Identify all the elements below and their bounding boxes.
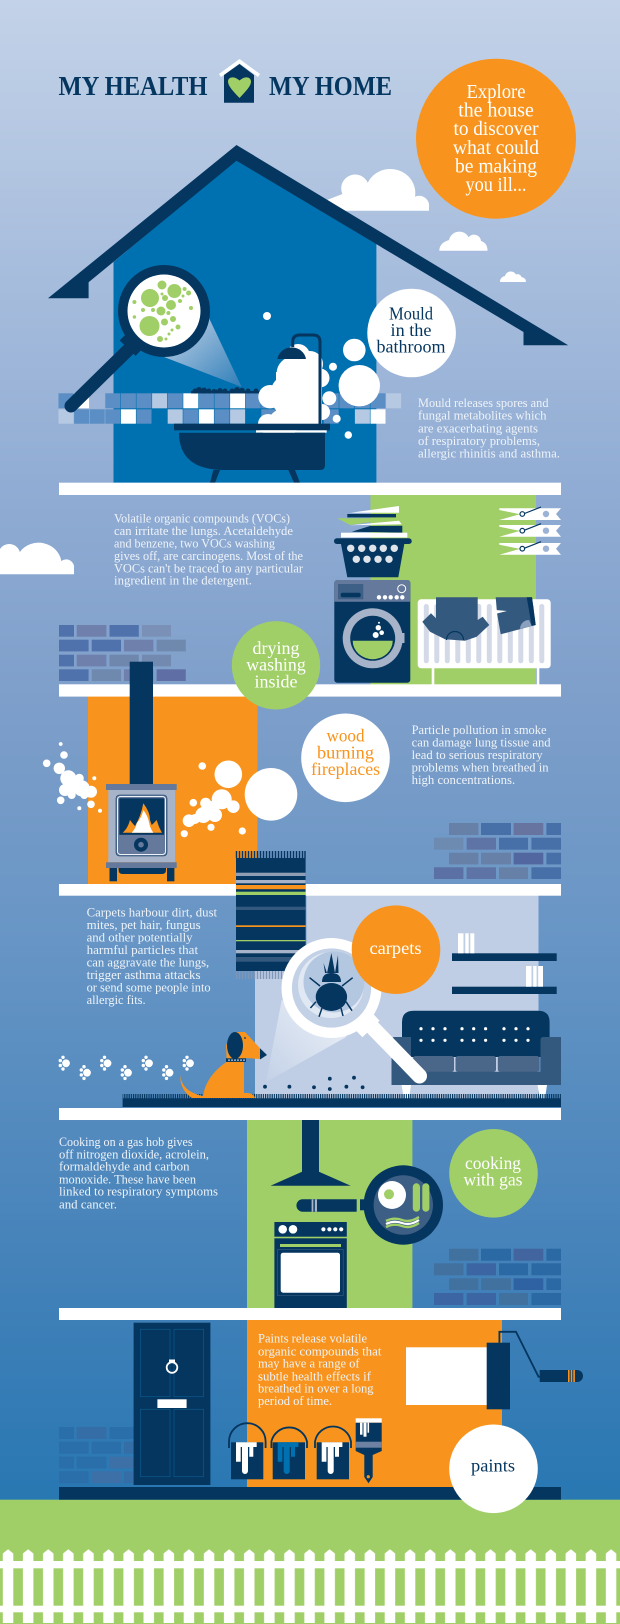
callout: explore the house: to discover [454, 118, 539, 140]
label: carpets: carpets [370, 938, 422, 958]
label: drying washing inside: washing [246, 655, 306, 675]
text: cooking description: and cancer. [59, 1197, 117, 1211]
panel: bathroom wall [114, 160, 376, 483]
text: mould description: are exacerbating agents [418, 421, 538, 435]
icon: magnifying glass with mould [71, 265, 210, 406]
text: particle pollution [412, 723, 551, 787]
text: VOCs: and benzene, two VOCs washing [114, 536, 275, 550]
text: VOCs: Volatile organic compounds (VOCs) [114, 511, 290, 525]
text: carpets description: can aggravate the lungs, [87, 955, 209, 969]
label: paints [449, 1424, 538, 1513]
label: cooking with gas: with gas [464, 1170, 522, 1190]
icon: paint roller [406, 1332, 583, 1409]
carpet floor [123, 1094, 561, 1107]
text: VOCs: ingredient in the detergent. [114, 574, 252, 588]
icon: washing machine [334, 580, 410, 683]
tile band [58, 393, 401, 424]
label: cooking with gas [449, 1129, 538, 1218]
text: cooking description: monoxide. These have been [59, 1172, 196, 1186]
text: mould description: of respiratory problems, [418, 434, 540, 448]
icon: wood burning stove [106, 784, 177, 881]
text: carpets description: or send some people into [87, 980, 211, 994]
text: cooking description: off nitrogen dioxide, acrolein, [59, 1147, 209, 1161]
text: VOCs: can irritate the lungs. Acetaldehyde [114, 524, 294, 538]
label: mould in the bathroom: bathroom [376, 337, 446, 357]
white picket fence [0, 1549, 620, 1624]
shelf 3 [59, 884, 561, 896]
mould patches on tile [191, 387, 260, 394]
label: wood burning fireplaces: burning [317, 742, 374, 762]
callout: explore the house [416, 59, 576, 219]
icon: hanging striped rug [236, 851, 306, 979]
cloud: small [500, 272, 526, 282]
icon: sofa [392, 1011, 561, 1098]
paw prints [59, 1056, 194, 1080]
text: carpets description: Carpets harbour dirt, dust [87, 906, 218, 920]
text: paints description: organic compounds that [258, 1344, 382, 1358]
label: drying washing inside [232, 621, 320, 710]
label: wood burning fireplaces: wood [326, 726, 364, 746]
shelf 5 [59, 1308, 561, 1320]
callout: explore the house: you ill... [466, 174, 526, 196]
icon: front door [134, 1323, 210, 1485]
text: carpets description: and other potentially [87, 930, 193, 944]
cloud: left [0, 543, 74, 574]
title: MY HOME [269, 71, 392, 101]
magnifier beam on mould [164, 318, 242, 387]
text: paints description: period of time. [258, 1394, 332, 1408]
text: cooking description: formaldehyde and carbon [59, 1160, 190, 1174]
bath foam and bubbles [258, 312, 380, 439]
cloud: medium [439, 232, 488, 251]
callout: explore the house: be making [455, 156, 537, 178]
text: paints description [258, 1332, 382, 1408]
text: cooking description [59, 1135, 218, 1211]
text: carpets description: mites, pet hair, fungus [87, 918, 201, 932]
icon: radiator with clothes drying [418, 597, 551, 685]
roof [48, 145, 568, 345]
text: particle pollution: problems when breathed in [412, 761, 549, 775]
text: paints description: subtle health effects if [258, 1369, 372, 1383]
label: drying washing inside: inside [254, 671, 298, 691]
panel: paint wall [247, 1320, 502, 1487]
icon: frying pan [296, 1165, 443, 1245]
text: particle pollution: lead to serious respiratory [412, 748, 543, 762]
icon: laundry basket with clothes [334, 506, 412, 577]
label: mould in the bathroom [367, 289, 456, 377]
text: cooking description: linked to respiratory symptoms [59, 1185, 218, 1199]
text: paints description: may have a range of [258, 1357, 360, 1371]
text: mould description [418, 396, 560, 460]
shelf 1 [59, 483, 561, 495]
icon: magnifying glass with dust mite [282, 938, 420, 1076]
text: particle pollution: can damage lung tissue and [412, 736, 551, 750]
text: mould description: fungal metabolites which [418, 409, 547, 423]
icon: bathtub with shower [174, 335, 330, 483]
text: mould description: Mould releases spores and [418, 396, 549, 410]
label: drying washing inside: drying [252, 638, 300, 658]
text: VOCs: VOCs can't be traced to any particular [114, 561, 304, 575]
smoke right of stove [181, 760, 297, 837]
bricks: upper left [59, 625, 186, 681]
shelf 2 [59, 684, 561, 697]
icon: chimney flue [130, 662, 153, 784]
icon: house with heart logo [219, 59, 260, 103]
text: carpets description [87, 906, 218, 1007]
label: mould in the bathroom: in the [390, 320, 432, 340]
icon: bookshelves [452, 933, 557, 994]
bricks: middle right [434, 823, 561, 879]
text: VOCs [114, 511, 304, 588]
label: paints: paints [471, 1456, 515, 1476]
grass [0, 1500, 620, 1624]
panel: laundry wall [370, 495, 536, 685]
icon: paint cans [229, 1423, 351, 1479]
callout: explore the house: what could [453, 137, 539, 159]
icon: clothes pegs [499, 507, 561, 555]
callout: explore the house: the house [458, 100, 534, 122]
text: particle pollution: Particle pollution in smoke [412, 723, 547, 737]
label: cooking with gas: cooking [465, 1153, 521, 1173]
text: carpets description: harmful particles that [87, 943, 199, 957]
label: wood burning fireplaces [301, 714, 390, 802]
shelf 4 [59, 1108, 561, 1120]
panel: fireplace wall [88, 696, 257, 884]
bricks: bottom left [59, 1427, 134, 1483]
icon: dog [180, 1032, 267, 1098]
panel: kitchen wall [247, 1120, 412, 1308]
smoke left of stove [43, 742, 102, 813]
icon: oven [274, 1222, 347, 1308]
text: VOCs: gives off, are carcinogens. Most of the [114, 549, 303, 563]
text: mould description: allergic rhinitis and asthma. [418, 446, 560, 460]
title [58, 71, 392, 101]
label: carpets [352, 905, 440, 994]
panel: carpets wall [255, 895, 538, 1107]
label: mould in the bathroom: Mould [389, 303, 433, 323]
text: cooking description: Cooking on a gas hob gives [59, 1135, 193, 1149]
title: MY HEALTH [58, 71, 208, 101]
text: paints description: breathed in over a long [258, 1382, 374, 1396]
text: carpets description: trigger asthma attacks [87, 968, 201, 982]
bricks: lower right [434, 1249, 561, 1305]
magnifier beam on carpet [266, 1000, 347, 1082]
dust specks [263, 1076, 364, 1091]
cloud: large [327, 169, 429, 211]
text: particle pollution: high concentrations. [412, 773, 515, 787]
text: paints description: Paints release volatile [258, 1332, 367, 1346]
icon: cooker hood [270, 1120, 351, 1186]
label: wood burning fireplaces: fireplaces [311, 759, 380, 779]
text: carpets description: allergic fits. [87, 993, 146, 1007]
ground strip [59, 1487, 561, 1500]
callout: explore the house: Explore [466, 81, 526, 103]
icon: paint brush [356, 1418, 382, 1483]
